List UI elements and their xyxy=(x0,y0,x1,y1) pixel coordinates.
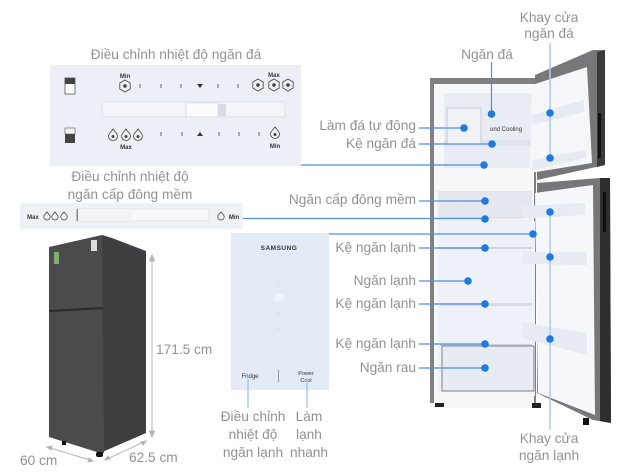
callout: fridge door tray: Khay cửa xyxy=(520,431,579,446)
label: fridge temperature: nhiệt độ xyxy=(229,427,278,442)
panel: samsung fridge control: Cool xyxy=(300,378,312,384)
panel: samsung fridge control: 7° xyxy=(276,343,282,349)
callout: soft freeze compartment: Ngăn cấp đông mềm xyxy=(289,192,416,207)
callout: fridge door tray: ngăn lạnh xyxy=(519,448,579,463)
callout: freezer shelf: Kệ ngăn đá xyxy=(346,136,416,151)
panel: samsung fridge control xyxy=(231,233,329,390)
heading: soft freeze control: Điều chỉnh nhiệt độ xyxy=(71,169,189,184)
panel: freezer control: Max xyxy=(120,145,132,151)
label: power cool: nhanh xyxy=(290,445,328,460)
panel: freezer control: Max xyxy=(268,73,280,79)
fridge exterior xyxy=(49,235,146,457)
panel: soft freeze control: Min xyxy=(229,215,239,221)
callout: freezer door tray: ngăn đá xyxy=(524,26,574,41)
callout: freezer door tray: Khay cửa xyxy=(520,10,579,25)
callout: fridge shelf 2: Kệ ngăn lạnh xyxy=(335,296,416,311)
callout: soft freeze compartment xyxy=(289,192,489,207)
panel: samsung fridge control: 4° xyxy=(276,327,282,333)
callout: fridge shelf 3 xyxy=(335,336,489,351)
leader: freezer control to fridge xyxy=(301,161,488,169)
dimension arrow: width xyxy=(105,441,146,460)
leader: power cool xyxy=(306,378,308,408)
heading: freezer control: Điều chỉnh nhiệt độ ngăn đá xyxy=(91,47,262,62)
leader: soft freeze control to fridge xyxy=(243,215,489,223)
callout: vegetable drawer: Ngăn rau xyxy=(360,360,416,375)
panel: freezer control: Min xyxy=(120,74,130,80)
callout: freezer compartment xyxy=(461,47,513,118)
label: fridge temperature: Điều chỉnh xyxy=(221,409,285,424)
callout: fridge shelf 1: Kệ ngăn lạnh xyxy=(335,240,416,255)
callout: fridge shelf 1 xyxy=(335,240,489,255)
dimension label: width 60: 60 cm xyxy=(20,453,57,468)
callout: freezer shelf xyxy=(346,136,496,151)
panel: soft freeze control: Max xyxy=(27,215,39,221)
label: fridge temperature: ngăn lạnh xyxy=(223,445,283,460)
leader: samsung control to fridge xyxy=(329,230,537,238)
panel: samsung fridge control: Fridge xyxy=(241,374,259,380)
panel: freezer control: Min xyxy=(270,144,280,150)
callout: vegetable drawer xyxy=(360,360,489,375)
label: power cool: lạnh xyxy=(296,427,322,442)
panel: samsung fridge control: Power xyxy=(298,371,314,377)
panel: soft freeze control xyxy=(20,203,243,229)
label: power cool: Làm xyxy=(296,409,322,424)
heading: soft freeze control: ngăn cấp đông mềm xyxy=(68,187,192,202)
freezer door xyxy=(530,50,605,180)
callout: freezer door tray xyxy=(520,10,579,162)
panel: samsung fridge control: 3° xyxy=(276,312,282,318)
panel: samsung fridge control: 1° xyxy=(276,281,282,287)
open refrigerator: und Cooling xyxy=(490,127,522,133)
callout: freezer compartment: Ngăn đá xyxy=(461,47,513,62)
dimension label: width 62.5: 62.5 cm xyxy=(129,450,178,465)
callout: fridge compartment: Ngăn lạnh xyxy=(354,273,416,288)
dimension arrow: height xyxy=(150,255,154,437)
dimension arrow: depth xyxy=(47,446,93,462)
dimension label: height: 171.5 cm xyxy=(156,342,212,357)
callout: automatic ice maker: Làm đá tự động xyxy=(319,118,416,133)
panel: samsung fridge control: SAMSUNG xyxy=(261,245,297,252)
open refrigerator xyxy=(430,78,541,408)
leader: fridge temperature xyxy=(247,377,249,408)
callout: fridge door tray xyxy=(519,208,579,463)
callout: fridge compartment xyxy=(354,273,472,288)
callout: fridge shelf 2 xyxy=(335,296,489,311)
callout: automatic ice maker xyxy=(319,118,468,133)
refrigerator door xyxy=(522,178,611,425)
callout: fridge shelf 3: Kệ ngăn lạnh xyxy=(335,336,416,351)
panel: freezer control xyxy=(50,65,301,166)
